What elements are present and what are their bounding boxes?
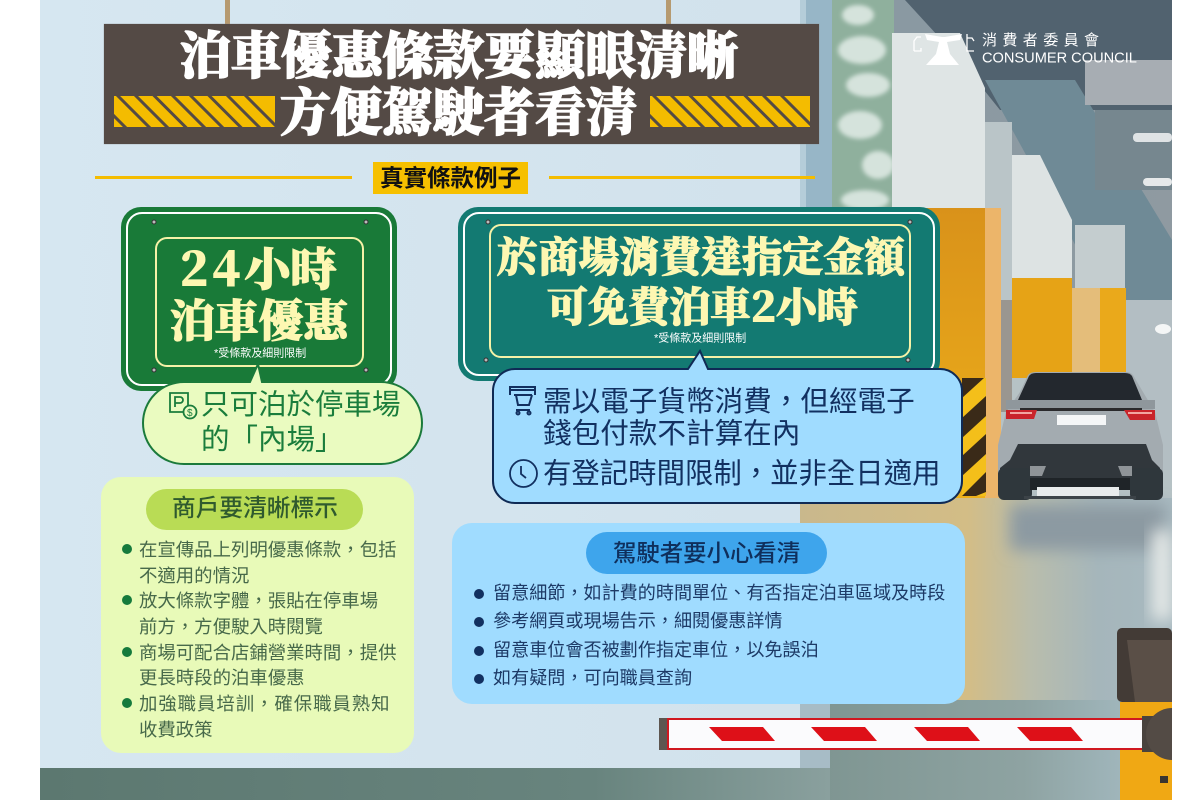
icon: parking payment: [169, 392, 198, 420]
title line 1: 泊車優惠條款要顯眼清晰: [180, 16, 738, 89]
bullet 1: [122, 539, 396, 586]
barrier gate: [659, 628, 1172, 800]
icon: clock: [509, 459, 538, 488]
license plate: [1057, 415, 1106, 425]
bullet 2: 放大條款字體，張貼在停車場: [139, 590, 378, 611]
hazard stripe left: [114, 96, 275, 127]
hazard stripe right: [650, 96, 810, 127]
panel: drivers: [452, 523, 965, 704]
sign inner frame: [155, 237, 364, 367]
sign white border: [463, 212, 935, 376]
illustration: silver car rear: [998, 372, 1163, 500]
tail lights: [1006, 410, 1037, 419]
callout text line 2: 的「內場」: [201, 424, 344, 456]
barrier arm: [659, 718, 668, 750]
title line 2: 方便駕駛者看清: [280, 71, 637, 145]
panel: teal sign: [458, 207, 940, 381]
sign white border: [126, 212, 392, 386]
ceiling: [894, 0, 1172, 288]
sign inner frame: [489, 224, 911, 358]
bullet 4: 如有疑問，可向職員查詢: [493, 668, 692, 688]
logo English name: CONSUMER COUNCIL: [982, 50, 1137, 66]
yellow-black bumper guard: [962, 378, 986, 496]
callout: blue bubble: [492, 349, 963, 504]
sign heading line 2: 泊車優惠: [170, 285, 348, 349]
car body: [998, 372, 1163, 490]
divider left: [95, 176, 352, 179]
bullet 2: [122, 590, 378, 637]
lower bumper: [1000, 444, 1160, 480]
rope left: [225, 0, 230, 24]
bullet 1: 不適用的情況: [139, 565, 249, 586]
orange column bases: [926, 208, 985, 498]
trees: [832, 0, 894, 210]
bullet 1: 留意細節，如計費的時間單位、有否指定泊車區域及時段: [493, 583, 945, 603]
barrier housing: [1117, 628, 1172, 702]
bullet 4: [122, 693, 390, 740]
rear window: [1018, 373, 1142, 400]
sign heading line 2: 可免費泊車2小時: [547, 275, 858, 334]
logo: Consumer Council: [913, 32, 1137, 66]
bullet 4: 收費政策: [139, 719, 213, 740]
bullet 3: 更長時段的泊車優惠: [139, 667, 305, 688]
panel: merchants: [101, 477, 414, 753]
drivers heading: 駕駛者要小心看清: [613, 540, 800, 566]
callout text line 1: 只可泊於停車場: [201, 389, 401, 421]
fine print: *受條款及細則限制: [214, 347, 306, 359]
bullet 1: 在宣傳品上列明優惠條款，包括: [139, 539, 396, 560]
drivers heading: [586, 532, 827, 574]
merchants heading: [146, 489, 363, 530]
icon: scales: [913, 34, 974, 65]
screws: [152, 220, 368, 372]
floor: [800, 498, 1172, 700]
bullet 3: [122, 642, 396, 688]
wheels: [998, 468, 1032, 500]
exhaust and step plate: [1030, 466, 1132, 476]
panel: green sign: [121, 207, 397, 391]
bullet 2: 參考網頁或現場告示，細閱優惠詳情: [493, 611, 783, 631]
icon: cart screen: [509, 386, 536, 416]
sign heading line 1: 24小時: [180, 233, 336, 299]
callout text line 3: 有登記時間限制，並非全日適用: [543, 458, 940, 490]
callout text line 2: 錢包付款不計算在內: [543, 418, 800, 450]
divider right: [549, 176, 815, 179]
callout text line 1: 需以電子貨幣消費，但經電子: [543, 386, 915, 418]
subheading label: 真實條款例子: [380, 165, 521, 191]
title board: [104, 24, 819, 144]
concrete columns: [892, 33, 985, 208]
screws: [484, 220, 912, 362]
merchants heading: 商戶要清晰標示: [172, 496, 338, 522]
rope right: [666, 0, 671, 24]
left wall: [40, 0, 800, 768]
bullet 3: 留意車位會否被劃作指定車位，以免誤泊: [493, 640, 819, 660]
fine print: *受條款及細則限制: [654, 332, 746, 344]
logo Chinese name: 消費者委員會: [982, 32, 1104, 49]
sign heading line 1: 於商場消費達指定金額: [497, 225, 905, 284]
bullet 3: 商場可配合店鋪營業時間，提供: [139, 642, 396, 663]
bullet 4: 加強職員培訓，確保職員熟知: [139, 693, 390, 714]
bullet 2: 前方，方便駛入時閱覽: [139, 616, 323, 637]
icon: parking payment: $: [187, 408, 193, 419]
callout: green bubble: [142, 365, 423, 465]
